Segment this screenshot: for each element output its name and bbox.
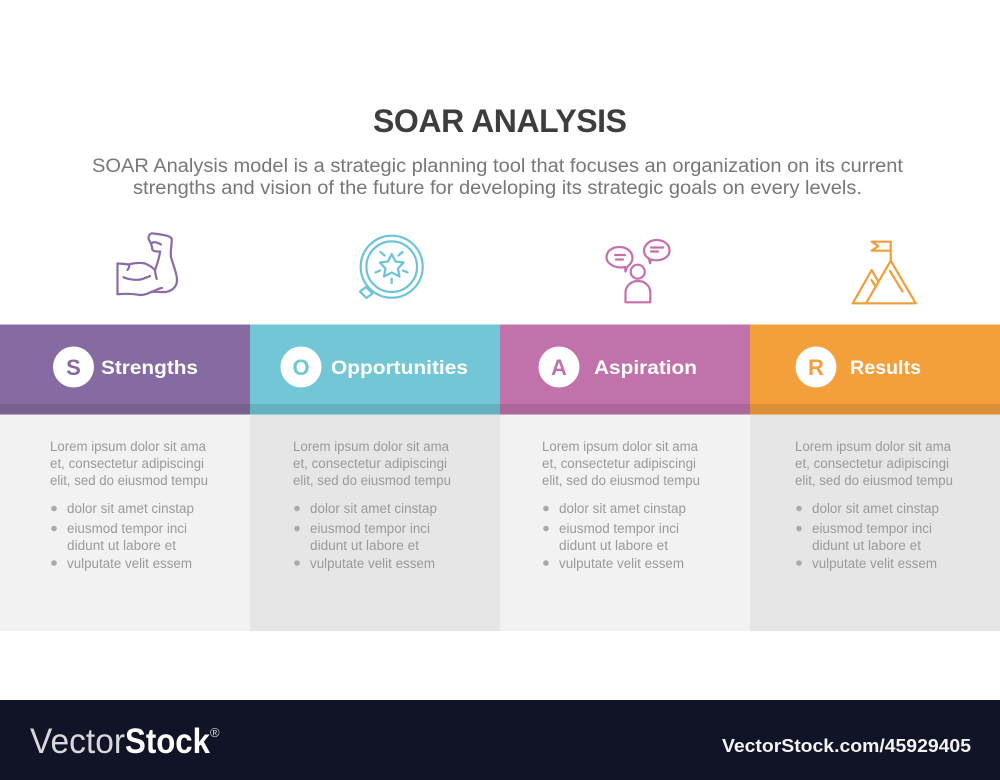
Aspiration text: dolor sit amet cinstap	[559, 501, 686, 516]
Aspiration text: et, consectetur adipiscingi	[542, 456, 696, 471]
Strengths heading: Strengths	[101, 358, 198, 379]
Opportunities badge: O	[292, 355, 310, 380]
Results text: didunt ut labore et	[812, 538, 921, 553]
icon: opportunity star compass	[360, 236, 423, 298]
Strengths text: elit, sed do eiusmod tempu	[50, 473, 208, 488]
Opportunities header band	[250, 324, 500, 404]
Aspiration text: eiusmod tempor inci	[559, 521, 679, 536]
icon: person with speech bubbles	[606, 240, 670, 302]
subtitle text block	[92, 156, 904, 199]
Aspiration text	[542, 439, 700, 571]
Opportunities text: et, consectetur adipiscingi	[293, 456, 447, 471]
icon: mountain with flag	[853, 242, 916, 303]
Opportunities text: dolor sit amet cinstap	[310, 501, 437, 516]
Opportunities text: vulputate velit essem	[310, 556, 435, 571]
Results body background	[750, 414, 1000, 631]
subtitle text block: SOAR Analysis model is a strategic planning tool that focuses an organization on its current	[92, 156, 904, 177]
Opportunities text: elit, sed do eiusmod tempu	[293, 473, 451, 488]
Results header band	[750, 324, 1000, 404]
icon: flexed arm	[118, 233, 177, 295]
Results badge: R	[808, 355, 824, 380]
footer bar	[0, 700, 1000, 780]
panel: Strengths	[0, 324, 250, 631]
Strengths text: Lorem ipsum dolor sit ama	[50, 439, 206, 454]
Results text: vulputate velit essem	[812, 556, 937, 571]
Opportunities text: didunt ut labore et	[310, 538, 419, 553]
Aspiration badge: A	[551, 355, 567, 380]
Strengths text: vulputate velit essem	[67, 556, 192, 571]
Results text: dolor sit amet cinstap	[812, 501, 939, 516]
Aspiration text: Lorem ipsum dolor sit ama	[542, 439, 698, 454]
Opportunities heading: Opportunities	[331, 358, 468, 379]
Results text: elit, sed do eiusmod tempu	[795, 473, 953, 488]
Strengths text: dolor sit amet cinstap	[67, 501, 194, 516]
panel: Results	[750, 324, 1000, 631]
panel: Opportunities	[250, 324, 500, 631]
Results heading: Results	[850, 358, 921, 379]
panel: Aspiration	[500, 324, 750, 631]
Strengths badge	[53, 346, 94, 388]
Opportunities text: Lorem ipsum dolor sit ama	[293, 439, 449, 454]
Strengths text: didunt ut labore et	[67, 538, 176, 553]
Results text: eiusmod tempor inci	[812, 521, 932, 536]
Aspiration heading: Aspiration	[594, 358, 697, 379]
Strengths header band	[0, 324, 250, 404]
Strengths body background	[0, 414, 250, 631]
Strengths text	[50, 439, 208, 571]
title: SOAR ANALYSIS	[373, 103, 627, 139]
Aspiration text: elit, sed do eiusmod tempu	[542, 473, 700, 488]
Opportunities text: eiusmod tempor inci	[310, 521, 430, 536]
Aspiration body background	[500, 414, 750, 631]
footer logo: ®	[210, 725, 220, 740]
Strengths text: et, consectetur adipiscingi	[50, 456, 204, 471]
Opportunities badge	[280, 346, 322, 388]
Aspiration text: didunt ut labore et	[559, 538, 668, 553]
footer logo: Vector	[30, 722, 125, 761]
Results text: Lorem ipsum dolor sit ama	[795, 439, 951, 454]
Strengths badge: S	[66, 355, 81, 380]
footer url: VectorStock.com/45929405	[722, 736, 971, 756]
Aspiration badge	[538, 346, 580, 388]
footer logo: Stock	[125, 722, 210, 761]
Strengths text: eiusmod tempor inci	[67, 521, 187, 536]
Results text	[795, 439, 953, 571]
Opportunities text	[293, 439, 451, 571]
Results text: et, consectetur adipiscingi	[795, 456, 949, 471]
Aspiration header band	[500, 324, 750, 404]
Aspiration text: vulputate velit essem	[559, 556, 684, 571]
Opportunities body background	[250, 414, 500, 631]
Results badge	[796, 346, 836, 388]
footer logo	[30, 722, 220, 761]
subtitle text block: strengths and vision of the future for developing its strategic goals on every levels.	[133, 178, 862, 199]
